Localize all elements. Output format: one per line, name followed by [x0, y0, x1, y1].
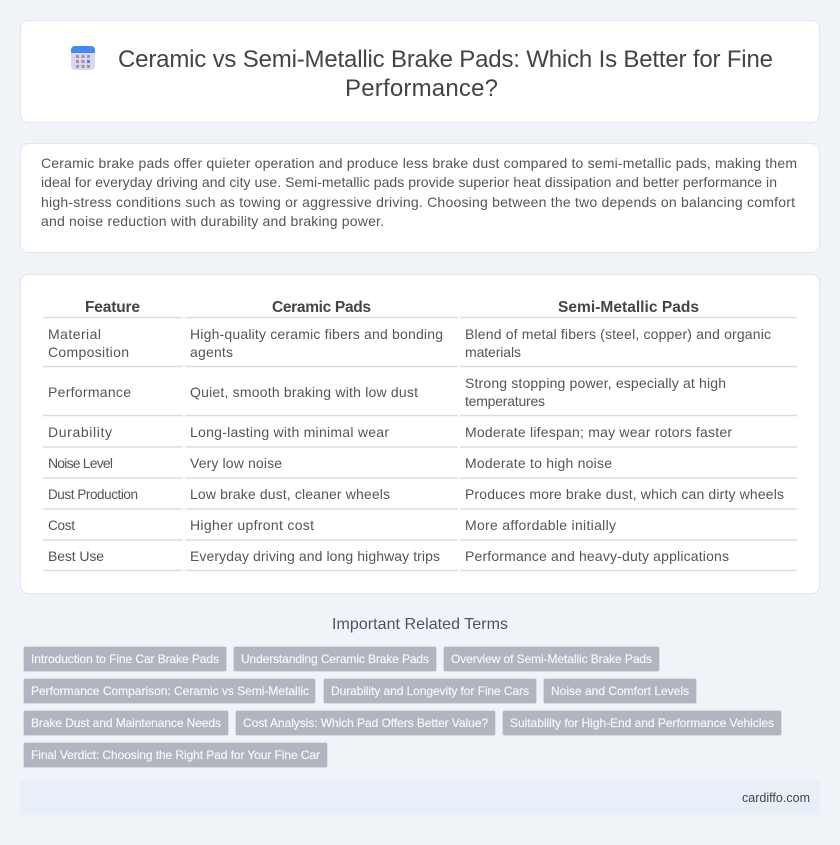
panel: header — [20, 20, 820, 122]
tag — [234, 646, 436, 672]
tag: Cost Analysis: Which Pad Offers Better Value? — [243, 716, 488, 730]
row: cost: More affordable initially — [465, 517, 616, 533]
row: durability: Moderate lifespan; may wear rotors faster — [465, 424, 732, 440]
text block: introduction: ideal for everyday driving and city use. Semi-metallic pads provide superior heat dissipation and better performance in — [41, 174, 777, 190]
tag — [24, 710, 228, 736]
row: material composition — [48, 326, 771, 360]
tag — [502, 710, 782, 736]
row: dust production: Produces more brake dust, which can dirty wheels — [465, 486, 784, 502]
row: material composition: Material — [48, 326, 101, 342]
tag: Overview of Semi-Metallic Brake Pads — [451, 652, 652, 666]
row: durability — [48, 424, 732, 440]
footer: cardiffo.com — [742, 791, 810, 805]
tag: Introduction to Fine Car Brake Pads — [31, 652, 219, 666]
text block: introduction: and noise reduction with durability and braking power. — [41, 213, 384, 229]
row: material composition: Blend of metal fibers (steel, copper) and organic — [465, 326, 771, 342]
tag: Suitability for High-End and Performance Vehicles — [510, 716, 774, 730]
row: durability: Long-lasting with minimal wear — [190, 424, 389, 440]
row: cost — [48, 517, 616, 533]
row: dust production: Dust Production — [48, 487, 138, 502]
tag: Understanding Ceramic Brake Pads — [241, 652, 429, 666]
row: best use: Performance and heavy-duty applications — [465, 548, 729, 564]
tag list — [24, 646, 782, 768]
row: cost: Higher upfront cost — [190, 517, 314, 533]
text block: introduction: Ceramic brake pads offer quieter operation and produce less brake dust compared to semi-metallic pads, making them — [41, 155, 797, 171]
tag — [544, 678, 696, 704]
panel: introduction — [20, 144, 820, 252]
tag — [24, 742, 328, 768]
row: performance — [48, 375, 726, 409]
row: performance: temperatures — [465, 393, 545, 409]
row: best use: Everyday driving and long highway trips — [190, 548, 440, 564]
footer — [20, 781, 820, 815]
row: material composition: materials — [465, 344, 521, 360]
row: performance: Strong stopping power, especially at high — [465, 375, 726, 391]
row: material composition: Composition — [48, 344, 129, 360]
tag: Performance Comparison: Ceramic vs Semi-Metallic — [31, 684, 309, 698]
icon: calendar — [71, 46, 95, 70]
row: best use: Best Use — [48, 548, 104, 564]
title: Performance? — [345, 75, 498, 102]
title — [118, 46, 773, 102]
table header — [85, 299, 699, 316]
table header: Ceramic Pads — [272, 299, 371, 316]
row: durability: Durability — [48, 424, 112, 440]
tag — [24, 646, 226, 672]
title: Ceramic vs Semi-Metallic Brake Pads: Which Is Better for Fine — [118, 46, 773, 73]
tag: Durability and Longevity for Fine Cars — [331, 684, 529, 698]
row: noise level: Noise Level — [48, 455, 113, 471]
row: performance: Performance — [48, 384, 131, 400]
row: material composition: agents — [190, 344, 233, 360]
row: noise level — [48, 455, 612, 471]
tag: Noise and Comfort Levels — [551, 684, 689, 698]
row: noise level: Moderate to high noise — [465, 455, 612, 471]
tag — [324, 678, 536, 704]
tag — [24, 678, 316, 704]
row: dust production: Low brake dust, cleaner wheels — [190, 486, 390, 502]
heading: important related terms: Important Related Terms — [332, 616, 508, 633]
table header: Feature — [85, 299, 140, 316]
row: dust production — [48, 486, 784, 502]
row: best use — [48, 548, 729, 564]
tag: Brake Dust and Maintenance Needs — [31, 716, 221, 730]
tag: Final Verdict: Choosing the Right Pad for Your Fine Car — [31, 748, 320, 762]
text block: introduction — [41, 155, 797, 229]
text block: introduction: high-stress conditions such as towing or aggressive driving. Choosing between the two depends on balancing comfort — [41, 194, 795, 210]
tag — [444, 646, 660, 672]
row: noise level: Very low noise — [190, 455, 282, 471]
panel: comparison table — [20, 274, 820, 594]
row: performance: Quiet, smooth braking with low dust — [190, 384, 418, 400]
table header: Semi-Metallic Pads — [558, 299, 699, 316]
row: material composition: High-quality ceramic fibers and bonding — [190, 326, 443, 342]
tag — [236, 710, 496, 736]
row: cost: Cost — [48, 518, 75, 533]
